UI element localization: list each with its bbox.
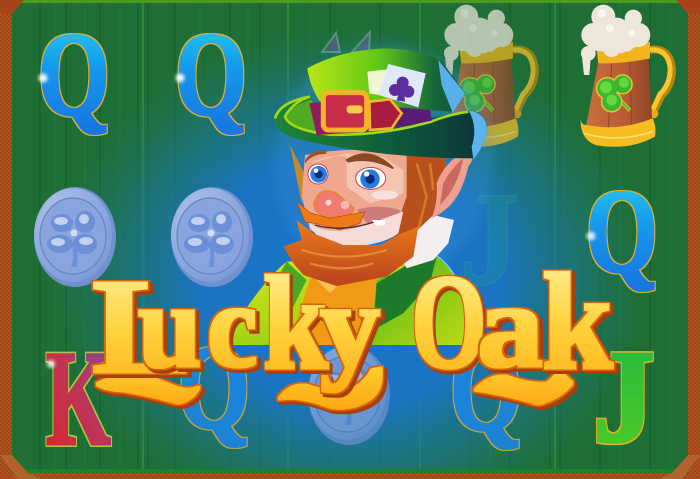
- title word: Lucky: [92, 250, 381, 408]
- character: leprechaun: [222, 43, 493, 345]
- white beard around mouth: [310, 212, 403, 247]
- symbol: faded coin bottom: [308, 345, 390, 445]
- title word: Lucky: y: [320, 259, 380, 392]
- title word: Oak: k: [542, 245, 613, 398]
- title word: Lucky: c: [207, 260, 258, 393]
- title word: Lucky: L: [92, 251, 194, 402]
- symbol: Q lower right: Q: [450, 324, 522, 456]
- character halo: [273, 43, 493, 283]
- eyes: [356, 167, 386, 189]
- symbol: coin column 1: [34, 187, 116, 287]
- eyebrows: [347, 154, 393, 168]
- symbol: Q right column: Q: [586, 166, 658, 298]
- moustache and smile: [297, 202, 365, 230]
- nose: [314, 191, 354, 217]
- symbol: beer mug right: [581, 5, 672, 147]
- second buckle strap: [369, 99, 402, 130]
- collars: [270, 262, 307, 307]
- white fur: [397, 215, 454, 268]
- belt buckle: [323, 93, 367, 130]
- title word: Lucky: u: [138, 260, 201, 393]
- symbol: faded K behind hat: [322, 32, 370, 52]
- title word: Lucky: k: [263, 250, 328, 398]
- symbol: Q lower left: Q: [178, 322, 250, 454]
- symbol: faded J centre right: J: [460, 166, 518, 313]
- hat brim: [275, 97, 487, 158]
- ear: [432, 152, 473, 218]
- title word: Oak: a: [477, 259, 544, 392]
- club on card: [389, 77, 414, 102]
- vest: [290, 278, 377, 345]
- title: Lucky Oak: [92, 245, 613, 408]
- hair and ear side: [390, 152, 447, 260]
- hat crown: [307, 48, 465, 112]
- symbol: Q column 2: Q: [175, 9, 247, 141]
- symbol: faded beer mug: [444, 5, 535, 147]
- jacket: [222, 257, 478, 345]
- face: [302, 150, 407, 243]
- symbol: coin column 2: [171, 187, 253, 287]
- symbol: J lower right: J: [593, 323, 655, 470]
- beard: [283, 220, 418, 286]
- title swash: L tail: [97, 372, 199, 403]
- title word: Oak: [411, 245, 613, 404]
- symbol: K lower left: K: [46, 323, 111, 474]
- title word: Oak: O: [411, 248, 487, 397]
- symbol: Q column 1: Q: [38, 9, 110, 141]
- playing cards in hat band: [367, 69, 390, 97]
- hat band: [309, 102, 432, 135]
